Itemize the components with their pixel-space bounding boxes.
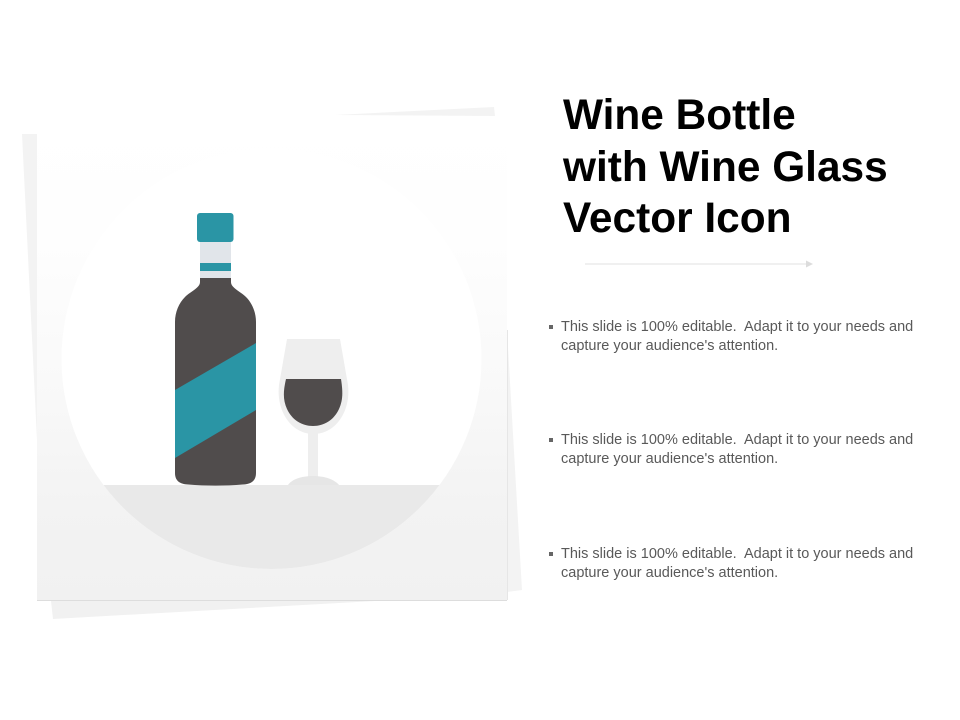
title: Wine Bottle	[563, 91, 796, 138]
text block: bullet 1: This slide is 100% editable. Adapt it to your needs and capture your audience's attention.	[561, 319, 913, 354]
text block: bullet 3: This slide is 100% editable. Adapt it to your needs and capture your audience's attention.	[561, 546, 913, 580]
arrow: title divider	[585, 260, 813, 268]
title	[562, 91, 888, 241]
icon: wine glass	[279, 339, 348, 485]
back sheet: rear rotated pages	[22, 107, 522, 619]
title: with Wine Glass	[563, 142, 888, 190]
panel: front sheet	[37, 116, 508, 600]
text block: bullet 2: This slide is 100% editable. Adapt it to your needs and capture your audience's attention.	[561, 432, 913, 466]
illustration: wine bottle and glass on stacked sheets	[22, 107, 812, 619]
circle backdrop with shelf	[73, 423, 470, 569]
icon: wine bottle	[175, 213, 256, 486]
title: Vector Icon	[563, 194, 792, 241]
